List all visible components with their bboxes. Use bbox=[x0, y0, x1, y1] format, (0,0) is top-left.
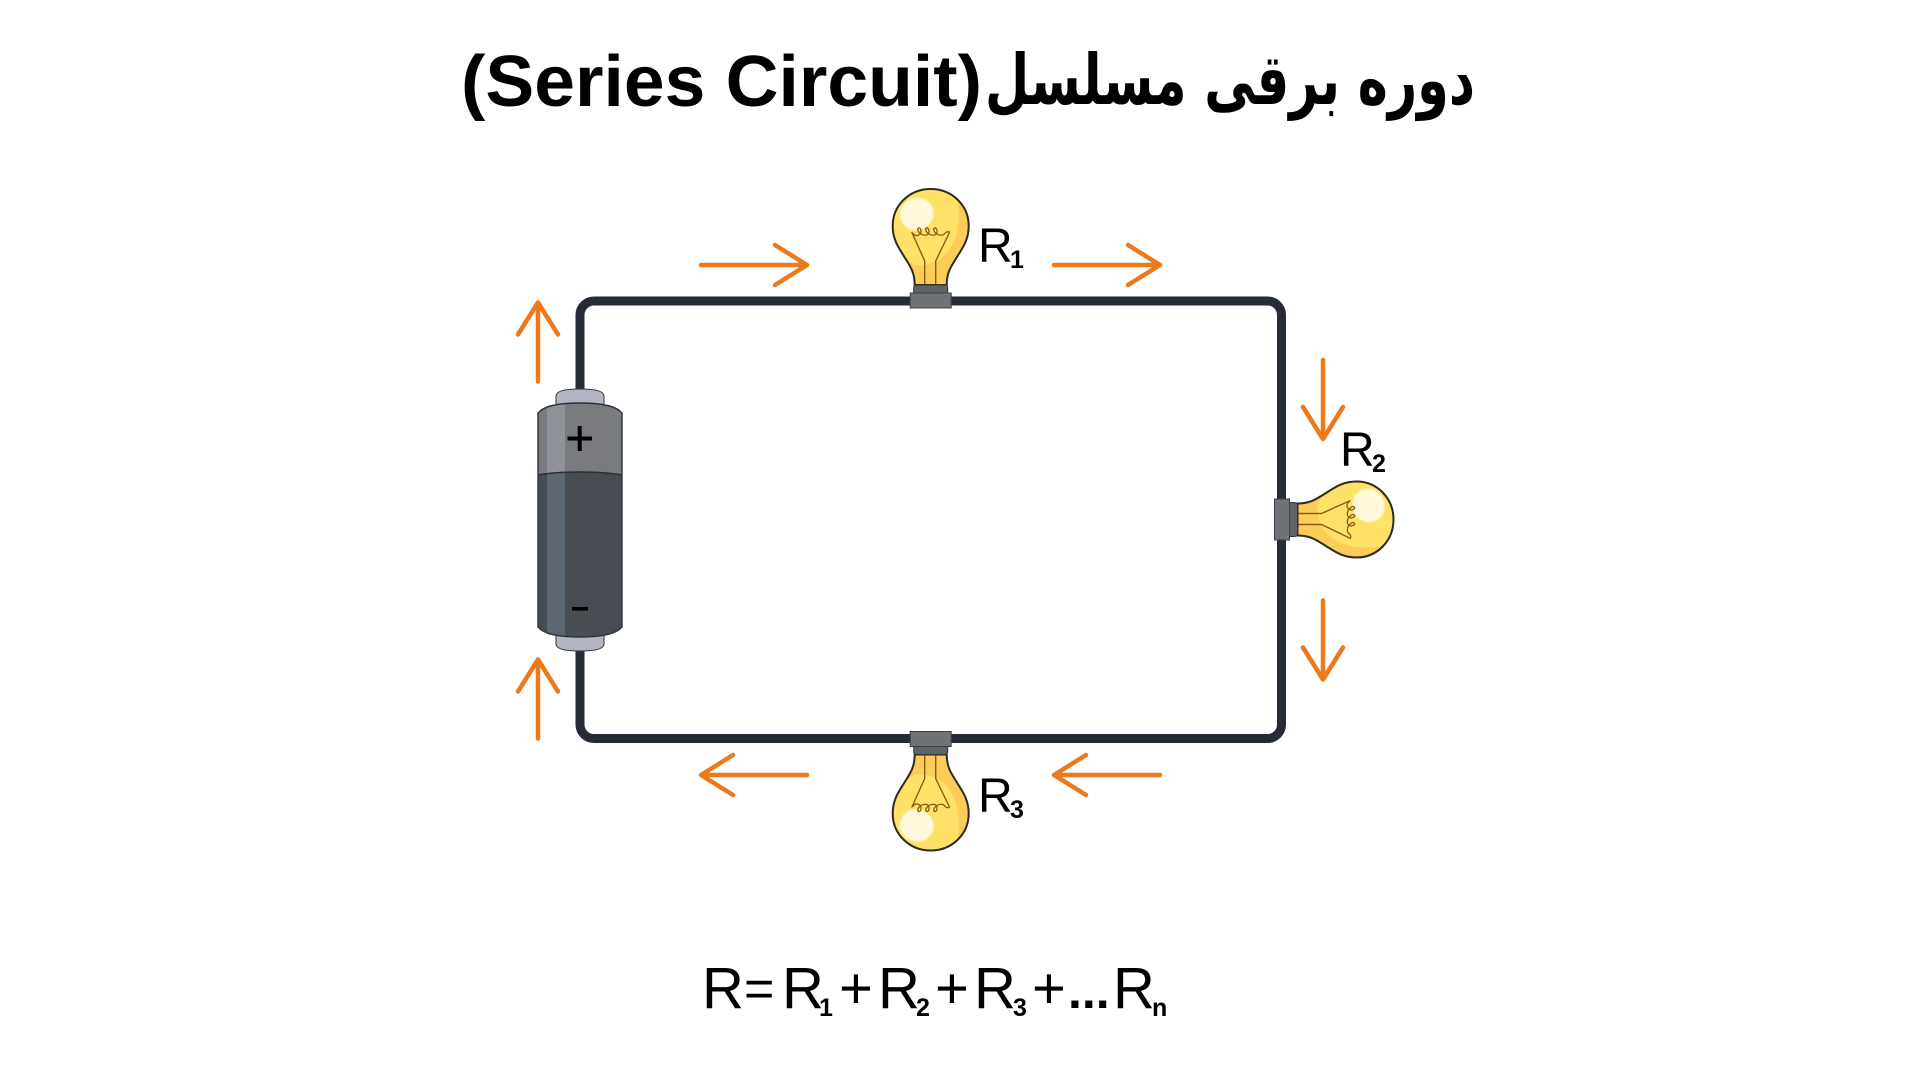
arrow: top right, rightward bbox=[1054, 245, 1160, 285]
formula: + bbox=[1032, 956, 1066, 1021]
formula: 1 bbox=[819, 994, 833, 1022]
label R2: 2 bbox=[1372, 450, 1386, 478]
minus sign bbox=[572, 607, 588, 611]
formula: 2 bbox=[916, 994, 930, 1022]
arrow: bottom left, leftward bbox=[701, 755, 807, 795]
plus sign bbox=[568, 426, 592, 451]
title: (Series Circuit) bbox=[461, 42, 982, 122]
label R3: 3 bbox=[1010, 796, 1024, 824]
label R1: 1 bbox=[1010, 246, 1024, 274]
bulb R2 bbox=[1274, 477, 1400, 558]
arrow: right upper, downward bbox=[1303, 360, 1343, 439]
label R1: R bbox=[978, 220, 1013, 273]
arrow: left lower, upward bbox=[518, 660, 558, 738]
formula: R bbox=[782, 956, 824, 1021]
circuit wire bbox=[580, 301, 1282, 738]
bulb R1 bbox=[888, 183, 969, 308]
formula: ... bbox=[1068, 963, 1110, 1019]
arrow: top left, rightward bbox=[701, 245, 807, 285]
arrow: bottom right, leftward bbox=[1054, 755, 1160, 795]
label R2: R bbox=[1340, 424, 1375, 477]
formula: R bbox=[702, 956, 744, 1021]
battery bbox=[538, 389, 622, 651]
bulb R3 bbox=[888, 732, 969, 856]
formula: + bbox=[839, 956, 873, 1021]
formula: n bbox=[1152, 994, 1167, 1022]
formula: = bbox=[744, 960, 774, 1018]
arrow: right lower, downward bbox=[1303, 600, 1343, 680]
title: دوره برقی مسلسل bbox=[985, 39, 1475, 121]
formula: R bbox=[974, 956, 1016, 1021]
formula: R bbox=[1113, 956, 1155, 1021]
label R3: R bbox=[978, 770, 1013, 823]
formula: R bbox=[878, 956, 920, 1021]
formula: + bbox=[935, 956, 969, 1021]
arrow: left upper, upward bbox=[518, 302, 558, 382]
title bbox=[461, 39, 1475, 122]
formula: 3 bbox=[1013, 994, 1027, 1022]
